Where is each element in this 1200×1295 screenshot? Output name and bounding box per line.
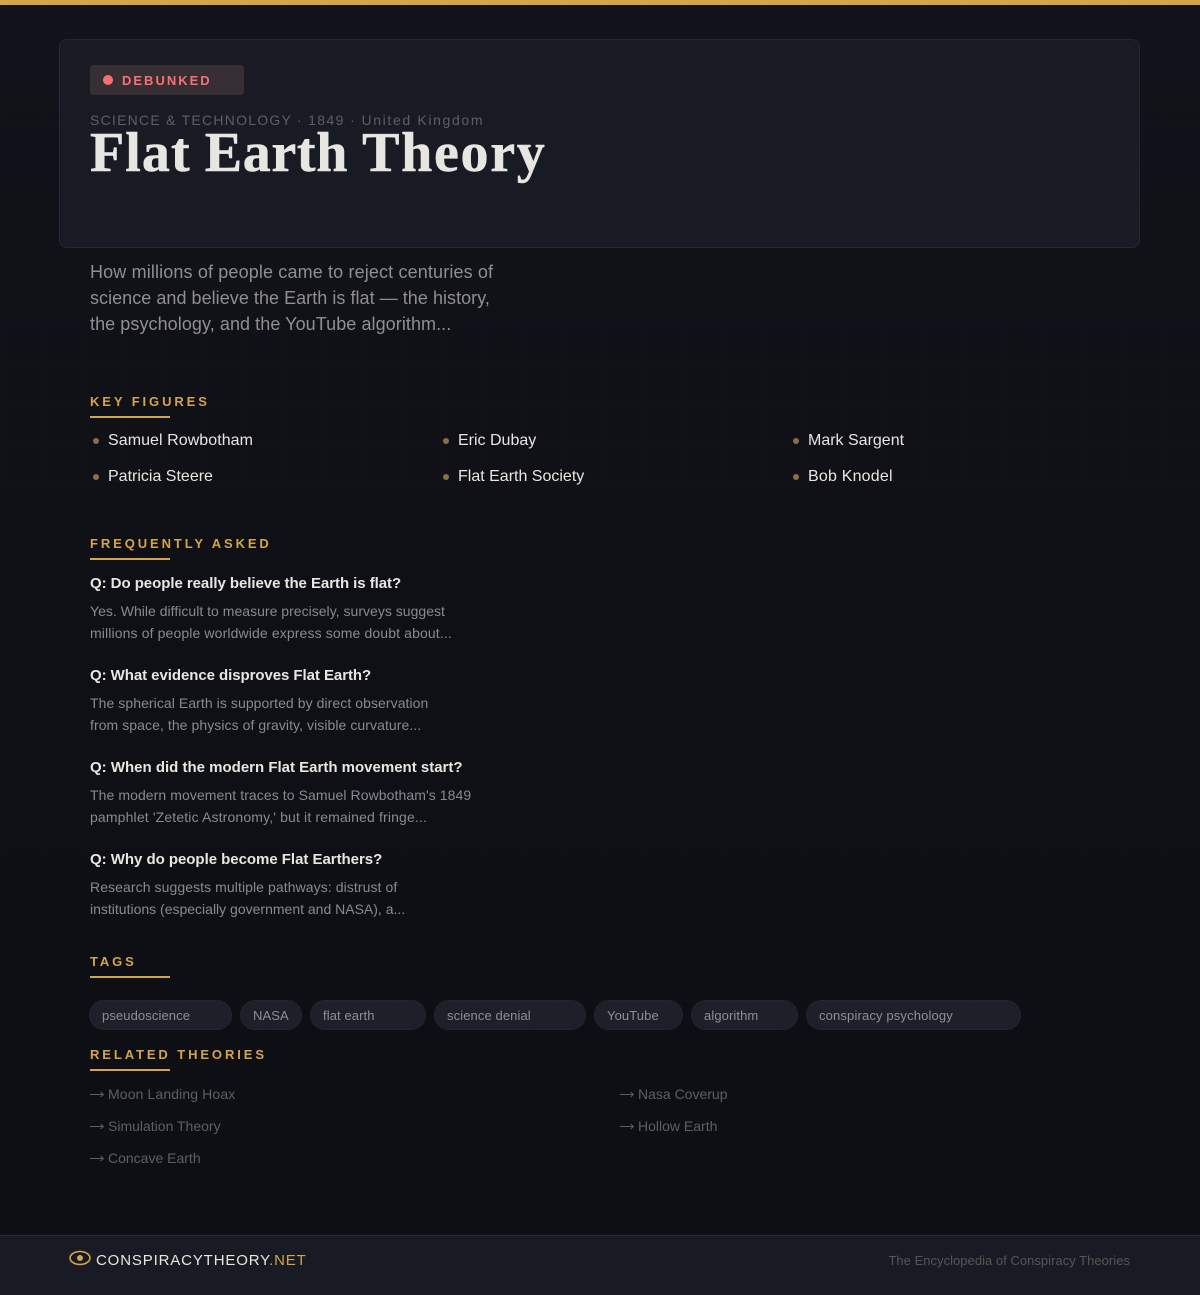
panel: key figures list: Flat Earth Society [458, 468, 584, 485]
heading: tags: TAGS [90, 954, 137, 969]
tag list: flat earth [323, 1008, 375, 1023]
tag list: algorithm [704, 1008, 758, 1023]
faq item 1: millions of people worldwide express some doubt about... [90, 625, 452, 641]
related theories list: Hollow Earth [638, 1118, 717, 1134]
icon: eye logo [69, 1250, 91, 1266]
faq item 3: pamphlet 'Zetetic Astronomy,' but it remained fringe... [90, 809, 427, 825]
tag list: pseudoscience [102, 1008, 190, 1023]
icon: status dot [103, 75, 113, 85]
related theories list: Nasa Coverup [638, 1086, 728, 1102]
panel: key figures list: Samuel Rowbotham [108, 432, 253, 449]
faq item 4 [90, 851, 405, 917]
intro text: How millions of people came to reject centuries of [90, 262, 493, 282]
related theories list: Concave Earth [108, 1150, 201, 1166]
intro text [90, 262, 493, 334]
faq item 1 [90, 575, 452, 641]
footer [0, 1235, 1200, 1295]
intro text: science and believe the Earth is flat — the history, [90, 288, 490, 308]
title: Flat Earth Theory [90, 122, 547, 184]
faq item 2: The spherical Earth is supported by direct observation [90, 695, 428, 711]
tag list [89, 1000, 1021, 1030]
panel: key figures list: Patricia Steere [108, 468, 213, 485]
panel: key figures list: Eric Dubay [458, 432, 536, 449]
heading: related theories: RELATED THEORIES [90, 1047, 267, 1062]
faq item 1: Q: Do people really believe the Earth is flat? [90, 575, 401, 592]
faq item 4: Research suggests multiple pathways: distrust of [90, 879, 397, 895]
faq item 3 [90, 759, 471, 825]
top accent bar [0, 0, 1200, 5]
heading: key figures: KEY FIGURES [90, 394, 210, 409]
faq item 3: Q: When did the modern Flat Earth movement start? [90, 759, 463, 776]
related theories list [90, 1086, 728, 1166]
panel: key figures list [93, 432, 904, 485]
faq item 2: from space, the physics of gravity, visible curvature... [90, 717, 421, 733]
tag list: science denial [447, 1008, 531, 1023]
faq item 2: Q: What evidence disproves Flat Earth? [90, 667, 371, 684]
faq item 4: institutions (especially government and NASA), a... [90, 901, 405, 917]
panel: key figures list: Bob Knodel [808, 468, 893, 485]
site logo text: CONSPIRACYTHEORY.NET [96, 1252, 307, 1269]
faq item 4: Q: Why do people become Flat Earthers? [90, 851, 382, 868]
heading: frequently asked: FREQUENTLY ASKED [90, 536, 272, 551]
intro text: the psychology, and the YouTube algorithm... [90, 314, 451, 334]
panel: header card [59, 39, 1140, 248]
panel: key figures list: Mark Sargent [808, 432, 904, 449]
related theories list: Simulation Theory [108, 1118, 221, 1134]
faq item 1: Yes. While difficult to measure precisely, surveys suggest [90, 603, 445, 619]
tag list: NASA [253, 1008, 289, 1023]
footer tagline: The Encyclopedia of Conspiracy Theories [888, 1253, 1130, 1268]
tag list: conspiracy psychology [819, 1008, 953, 1023]
related theories list: Moon Landing Hoax [108, 1086, 235, 1102]
category and date line: SCIENCE & TECHNOLOGY · 1849 · United Kingdom [90, 112, 484, 128]
tag list: YouTube [607, 1008, 659, 1023]
faq item 3: The modern movement traces to Samuel Rowbotham's 1849 [90, 787, 471, 803]
faq item 2 [90, 667, 428, 733]
badge label: DEBUNKED [122, 73, 212, 88]
status badge: debunked [90, 65, 244, 95]
